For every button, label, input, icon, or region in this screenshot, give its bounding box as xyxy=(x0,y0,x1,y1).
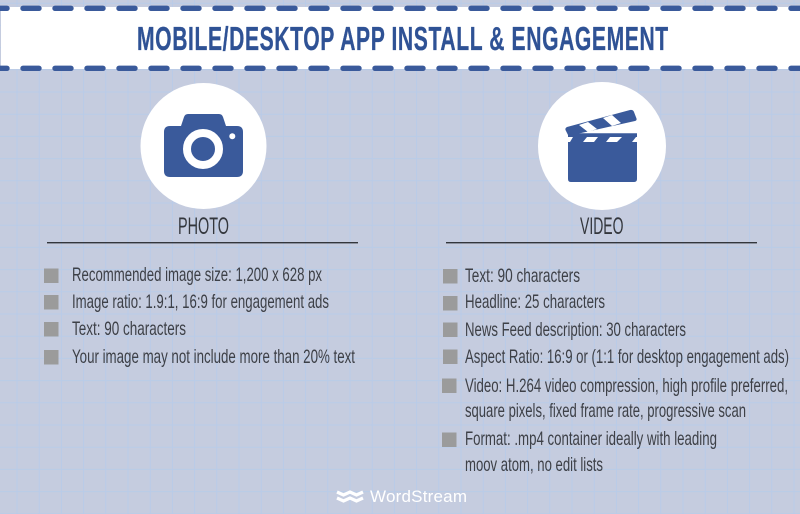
video requirements list: Headline: 25 characters xyxy=(465,291,605,313)
heading: video: VIDEO xyxy=(580,213,624,240)
icon: clapperboard xyxy=(538,82,666,210)
video requirements list xyxy=(442,265,789,476)
video requirements list: Text: 90 characters xyxy=(465,265,580,287)
video requirements list: moov atom, no edit lists xyxy=(465,454,603,476)
title: MOBILE/DESKTOP APP INSTALL & ENGAGEMENT xyxy=(137,20,668,57)
icon: camera xyxy=(140,83,266,209)
photo requirements list xyxy=(44,264,355,368)
video requirements list: News Feed description: 30 characters xyxy=(465,319,686,341)
panel: video xyxy=(442,82,789,476)
heading: photo: PHOTO xyxy=(178,213,229,240)
panel: photo xyxy=(44,83,358,368)
photo requirements list: Text: 90 characters xyxy=(72,318,186,340)
icon: waves xyxy=(337,492,363,501)
divider: photo xyxy=(47,242,358,243)
wordmark: WordStream xyxy=(370,487,467,506)
header banner xyxy=(0,7,800,69)
divider: video xyxy=(446,242,757,243)
photo requirements list: Image ratio: 1.9:1, 16:9 for engagement ads xyxy=(72,291,329,313)
WordStream logo xyxy=(337,487,467,506)
photo requirements list: Your image may not include more than 20% text xyxy=(72,346,355,368)
photo requirements list: Recommended image size: 1,200 x 628 px xyxy=(72,264,322,286)
